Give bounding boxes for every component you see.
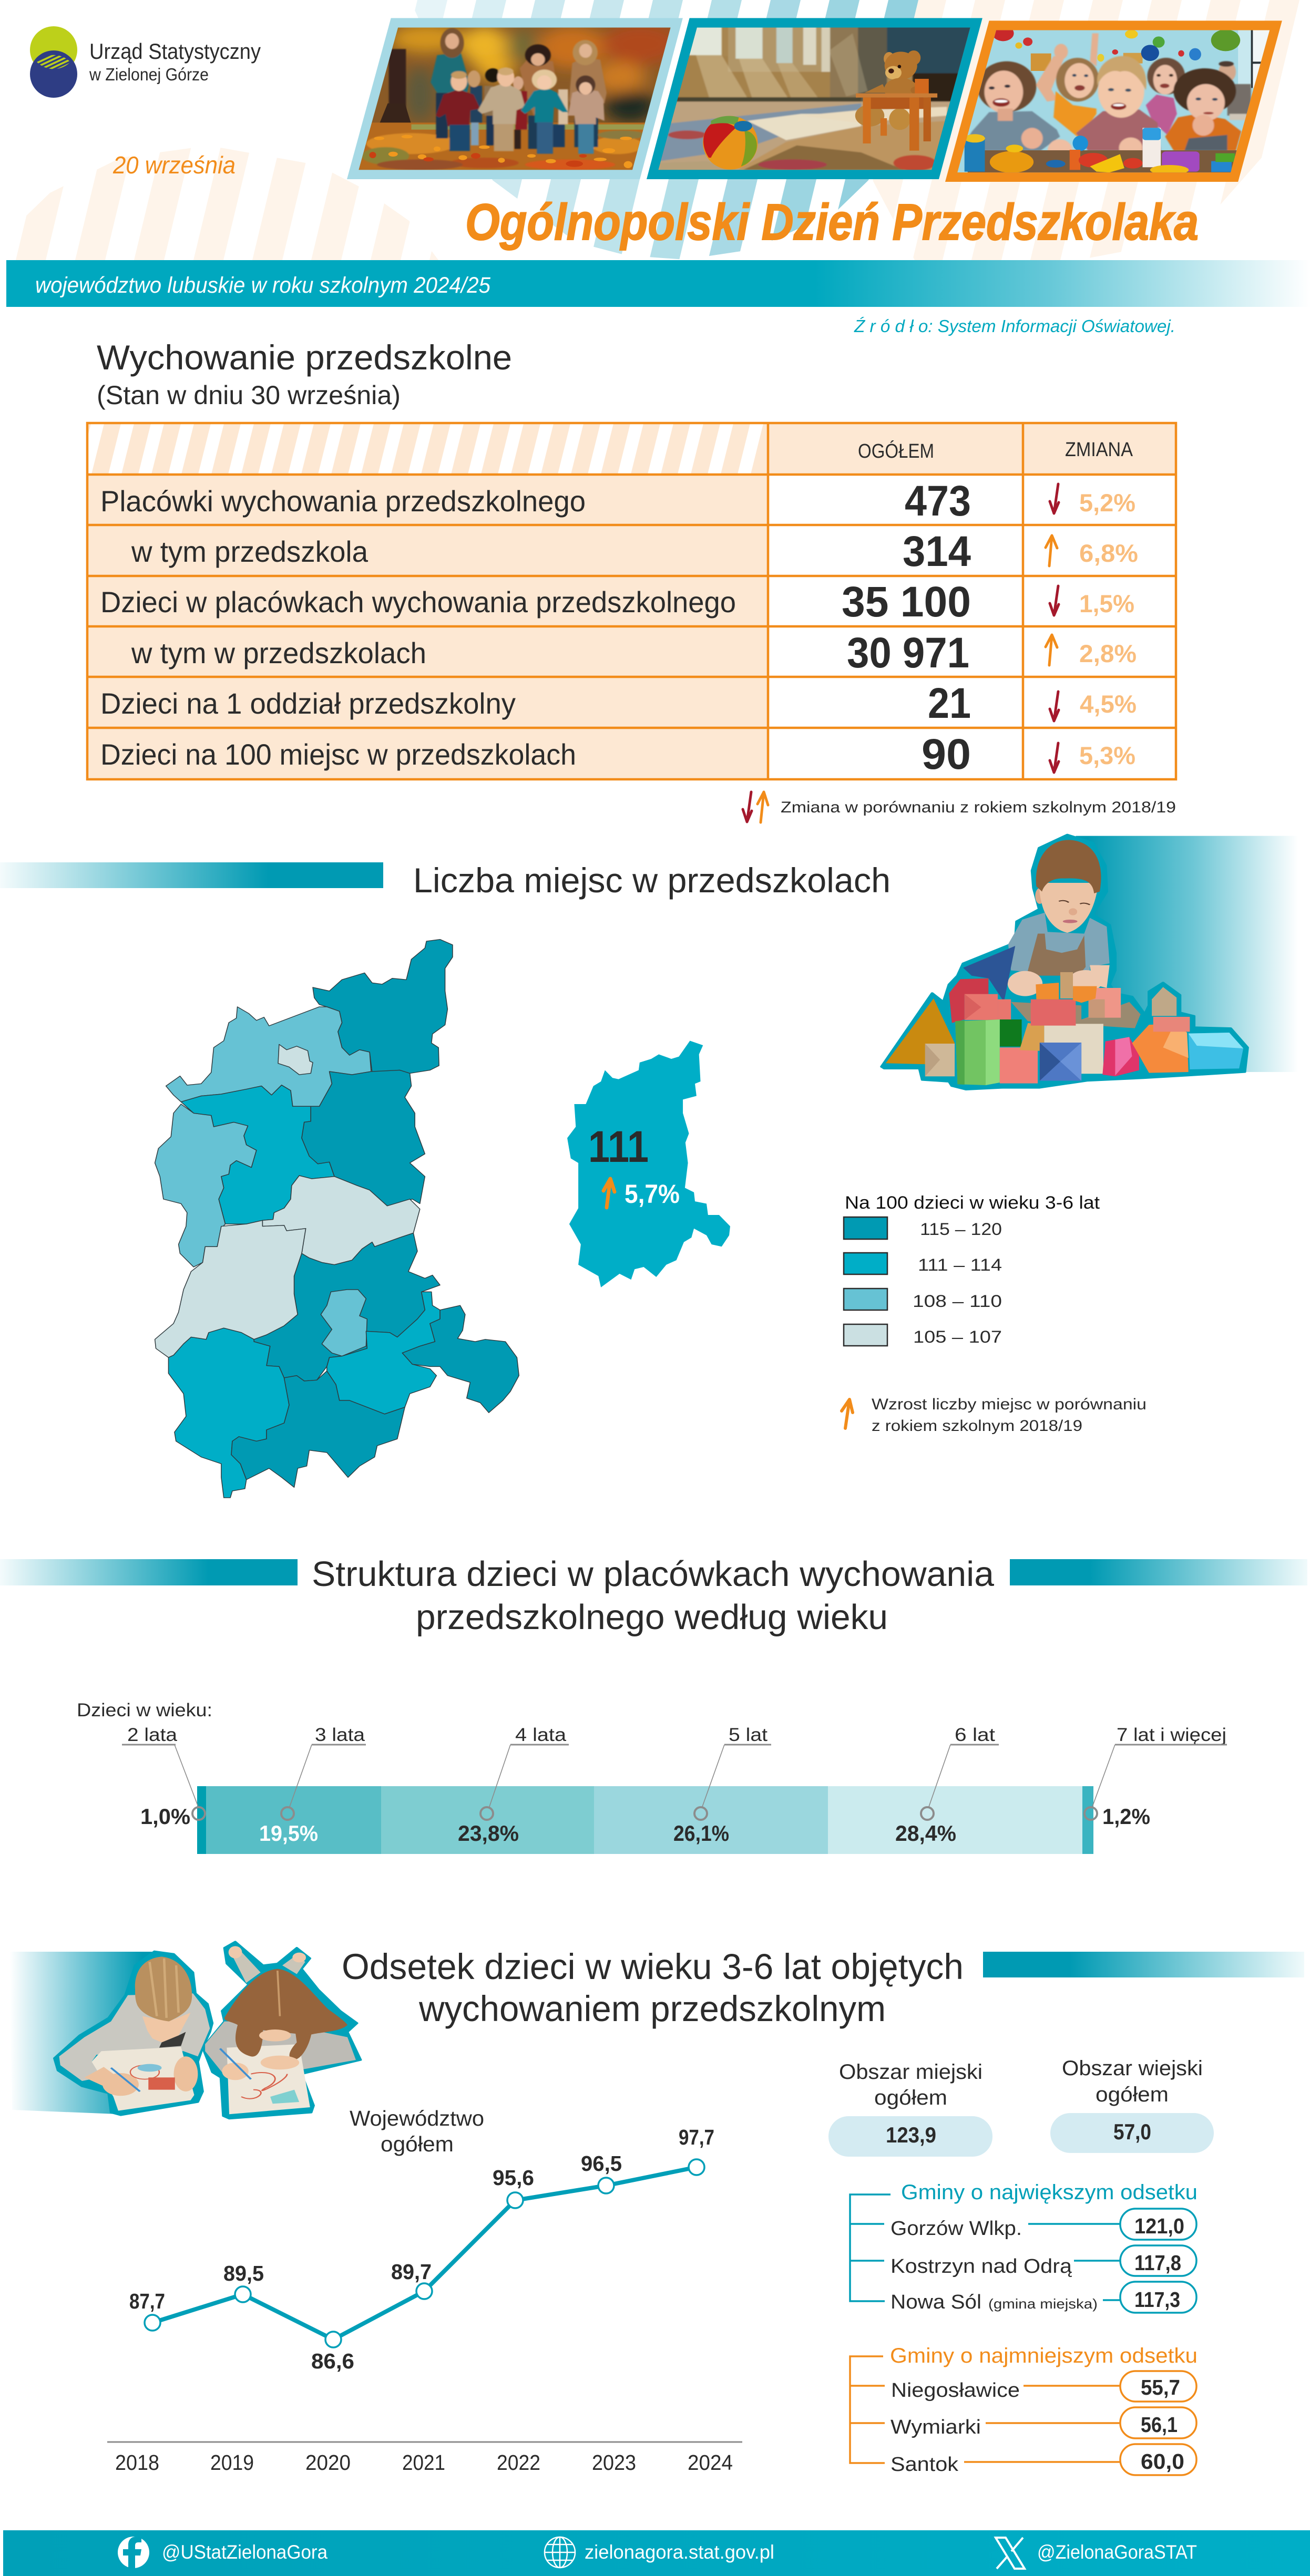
footer: @UStatZielonaGora [162,2541,328,2563]
table and toys [968,150,1246,173]
totals [842,477,971,778]
table [856,94,937,98]
photo: teddy bear and beach ball in a sunlit room [647,18,984,179]
rural total [1050,2057,1214,2153]
footer: zielonagora.stat.gov.pl [585,2541,774,2563]
column headers: OGÓŁEM [858,440,934,462]
year labels: 2020 [305,2450,351,2475]
icon: facebook [118,2537,149,2568]
trend line [145,2159,704,2347]
change percentages: 5,2% [1079,489,1135,517]
boy [1076,109,1161,151]
age labels: 3 lata [315,1725,365,1745]
value labels: 87,7 [129,2289,165,2313]
map legend: 111 – 114 [918,1255,1002,1274]
heading: Liczba miejsc w przedszkolach: Liczba miejsc w przedszkolach [413,861,891,900]
list: lowest share municipalities: Wymiarki [891,2416,981,2438]
main title: Ogólnopolski Dzień Przedszkolaka [465,193,1199,251]
list: highest share municipalities: 121,0 [1134,2214,1184,2238]
row labels: Placówki wychowania przedszkolnego [100,485,586,518]
back figures [1227,84,1251,116]
heading: share of children [342,1946,964,2029]
heading: age structure: Struktura dzieci w placówkach wychowania [312,1554,995,1594]
year labels: 2019 [210,2450,254,2475]
map legend: 115 – 120 [920,1220,1002,1239]
list: lowest share municipalities: Niegosławice [891,2379,1020,2402]
totals: 21 [928,679,971,727]
boy figure [1008,840,1141,1028]
row labels: Dzieci w placówkach wychowania przedszkolnego [100,585,736,619]
change percentages: 4,5% [1080,690,1137,718]
logo: Urząd Statystyczny w Zielonej Górze: Urząd Statystyczny [89,39,261,64]
list: lowest share municipalities: Gminy o najmniejszym odsetku [890,2344,1198,2367]
heading: share of children: wychowaniem przedszkolnym [418,1988,886,2029]
blocks [886,946,1243,1085]
year labels: 2023 [592,2450,636,2475]
leader lines [122,1745,1227,1820]
subtitle band [6,260,1310,307]
percentages [140,1804,1150,1846]
totals: 473 [905,477,971,525]
year labels: 2018 [115,2450,159,2475]
change percentages: 5,3% [1079,741,1135,769]
map: counties of Lubuskie voivodeship [155,940,519,1498]
value labels: 86,6 [311,2349,354,2373]
list: highest share municipalities: 117,8 [1134,2251,1181,2275]
table footnote: Zmiana w porównaniu z rokiem szkolnym 2018/19 [781,799,1176,816]
value labels: 89,5 [223,2261,264,2285]
logo: Urząd Statystyczny w Zielonej Górze [30,26,261,98]
change percentages: 1,5% [1079,590,1134,617]
age labels: 5 lat [729,1725,767,1745]
legend note: growth arrow: z rokiem szkolnym 2018/19 [872,1417,1082,1435]
percentages: 23,8% [458,1821,519,1846]
image: boy with wooden blocks [882,834,1309,1089]
value labels: 96,5 [581,2151,622,2176]
footer: @ZielonaGoraSTAT [1037,2541,1197,2563]
urban total: 123,9 [886,2122,936,2147]
change arrows [1046,484,1059,772]
stacked bar: age structure [77,1700,1227,1854]
bar segments [197,1786,1093,1854]
source note: Ź r ó d ł o: System Informacji Oświatowej. [854,316,1175,336]
chart title [350,2106,484,2156]
age labels: 2 lata [127,1725,178,1745]
photo: happy children in a classroom [945,20,1283,182]
rural total: 57,0 [1113,2119,1151,2144]
chart title: Województwo [350,2106,484,2130]
legend note: growth arrow [842,1396,1147,1435]
urban total [828,2060,992,2157]
urban total: ogółem [874,2086,947,2109]
section bars: age structure [0,1559,1307,1585]
list: highest share municipalities: Nowa Sól [891,2291,981,2313]
row labels: w tym w przedszkolach [131,636,426,669]
rural total: Obszar wiejski [1062,2057,1203,2080]
age labels: 6 lat [955,1725,995,1745]
right child [1165,114,1241,151]
row labels: Dzieci na 1 oddział przedszkolny [100,687,516,720]
heading: age structure: przedszkolnego według wieku [416,1598,888,1637]
list: lowest share municipalities [850,2344,1198,2476]
totals: 314 [903,528,971,575]
age labels: Dzieci w wieku: [77,1700,212,1720]
boy [59,1956,210,2111]
chart title: ogółem [381,2132,454,2156]
section bar: share of children [983,1952,1304,1977]
column headers: ZMIANA [1065,439,1133,461]
map legend: Na 100 dzieci w wieku 3-6 lat [845,1193,1100,1213]
year labels: 2021 [402,2450,445,2475]
change percentages: 2,8% [1079,640,1137,667]
teddy [884,52,894,65]
map legend: 108 – 110 [913,1292,1002,1311]
line chart: voivodeship total [107,2106,742,2475]
percentages: 26,1% [673,1821,729,1846]
table: preschool education [87,423,1176,779]
footer [3,2530,1310,2576]
header background stripes [16,0,1310,260]
value labels: 97,7 [679,2125,714,2149]
section bar: places [0,862,383,888]
urban total: Obszar miejski [839,2060,983,2084]
year labels: 2024 [688,2450,733,2475]
map: voivodeship total: 5,7% [625,1179,680,1209]
image: two children drawing [9,1942,361,2119]
beach ball [703,116,758,170]
change percentages: 6,8% [1079,539,1138,567]
value labels [129,2125,714,2373]
subtitle band: województwo lubuskie w roku szkolnym 2024/25 [35,273,491,298]
people [436,93,448,138]
totals: 35 100 [842,578,971,626]
list: lowest share municipalities: Santok [891,2454,959,2476]
percentages: 19,5% [259,1821,318,1846]
age labels: 7 lat i więcej [1117,1725,1226,1745]
table footnote [743,792,1176,822]
list: lowest share municipalities: 60,0 [1141,2449,1184,2474]
photo: families walking in autumn park [347,18,683,179]
icon: globe [545,2537,575,2568]
percentages: 1,0% [140,1804,190,1829]
list: lowest share municipalities: 55,7 [1141,2375,1180,2399]
age labels: 4 lata [515,1725,567,1745]
legend note: growth arrow: Wzrost liczby miejsc w porównaniu [872,1396,1147,1413]
map legend: 105 – 107 [913,1327,1002,1346]
heading: age structure [312,1554,995,1637]
list: highest share municipalities: 117,3 [1134,2288,1180,2312]
list: highest share municipalities: Gorzów Wlkp. [891,2218,1022,2240]
change percentages [1079,489,1138,769]
girl [205,1946,356,2114]
year labels: 2022 [497,2450,540,2475]
list: highest share municipalities: (gmina miejska) [988,2296,1098,2312]
heading: Wychowanie przedszkolne: Wychowanie przedszkolne [97,338,512,377]
totals: 30 971 [847,629,969,677]
value labels: 95,6 [493,2166,534,2190]
totals: 90 [922,730,971,778]
list: highest share municipalities [850,2181,1198,2313]
rural total: ogółem [1096,2083,1169,2106]
row labels [100,485,736,771]
icon: X [996,2538,1025,2569]
heading: Wychowanie przedszkolne [97,338,512,410]
heading: Wychowanie przedszkolne: (Stan w dniu 30 września) [97,380,401,410]
age labels [77,1700,1226,1745]
heading: share of children: Odsetek dzieci w wieku 3-6 lat objętych [342,1946,964,1987]
left girl [970,111,1060,151]
percentages: 28,4% [895,1821,956,1846]
date: 20 września: 20 września [112,151,236,179]
map: voivodeship total [567,1040,730,1287]
percentages: 1,2% [1102,1804,1150,1829]
year labels [115,2450,733,2475]
leaves [374,135,632,168]
map: voivodeship total: 111 [588,1122,649,1171]
row labels: w tym przedszkola [131,535,369,568]
map legend [844,1193,1100,1346]
logo: Urząd Statystyczny w Zielonej Górze: w Zielonej Górze [89,65,209,84]
list: highest share municipalities: Kostrzyn nad Odrą [891,2255,1072,2278]
column headers [858,439,1133,462]
list: lowest share municipalities: 56,1 [1141,2413,1178,2437]
value labels: 89,7 [391,2260,432,2284]
row labels: Dzieci na 100 miejsc w przedszkolach [100,738,576,771]
list: highest share municipalities: Gminy o największym odsetku [901,2181,1198,2204]
